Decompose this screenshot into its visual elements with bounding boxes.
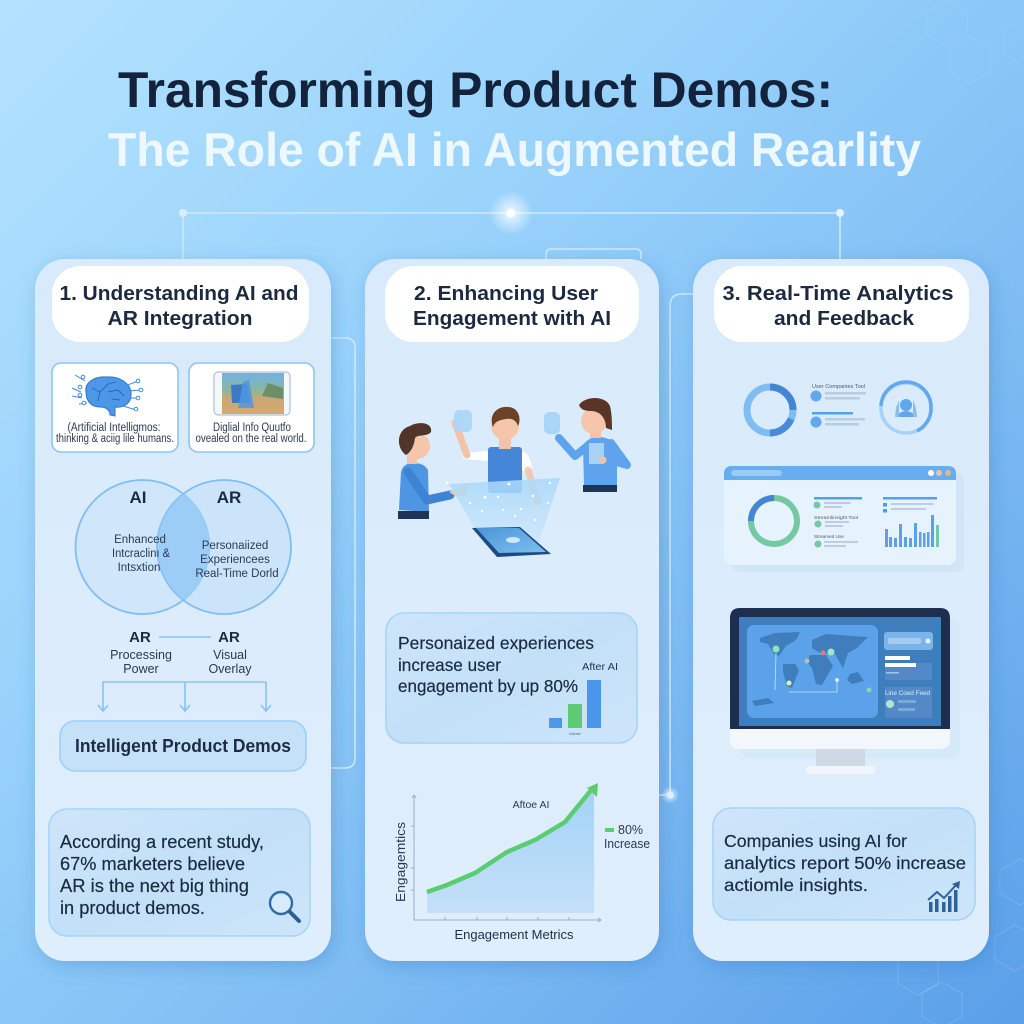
panel 3: real-time analytics and feedback [693,259,989,961]
venn labels: Real-Time Dorld [195,568,279,580]
panel 2 heading: 2. Enhancing User [414,282,598,305]
stat callout: personalized experiences: increase user [398,655,501,675]
chart axes [411,795,601,922]
panel 1 background [35,259,331,961]
stat callout: 67% marketers: According a recent study, [60,831,264,852]
title [108,62,921,176]
person left [398,423,468,519]
stat callout: 67% marketers: in product demos. [60,897,205,918]
legend lines [810,384,866,428]
panel 1 heading [52,266,309,342]
stat callout: 50% actionable insights: Companies using AI for [724,831,907,851]
stat callout: 67% marketers: 67% marketers believe [60,853,245,874]
panel 1 heading: AR Integration [108,307,252,330]
user ring widget [881,382,931,433]
panel 1 heading: 1. Understanding AI and [60,282,298,305]
panel 3 heading: 3. Real-Time Analytics [722,282,954,305]
dashboard list: Streamed Use [814,534,845,539]
venn labels [112,488,279,580]
panel 2 background [365,259,659,961]
icon: brain [72,375,143,416]
monitor side panels [884,632,933,718]
venn labels: AR [217,488,241,507]
hologram projection [446,478,560,545]
stat callout: personalized experiences: Personaized experiences [398,633,594,653]
monitor frame [730,608,950,729]
panel 3 heading [714,266,969,342]
panel 3 heading: and Feedback [774,307,915,330]
AR capabilities row [110,629,252,676]
legend lines: User Companies Tool [812,384,865,390]
stat callout: 50% actionable insights: actiomle insights. [724,875,868,895]
trend line [427,789,592,892]
dashboard list [814,497,862,548]
AR capabilities row: Visual [213,648,247,662]
card text: Diglial Info Quutfo [213,422,291,434]
world map [747,625,878,718]
chart labels: 80% [618,823,643,837]
venn labels: Enhanced [114,534,166,546]
stat callout: 50% actionable insights [713,808,975,920]
card: artificial intelligence: thinking & aciig lile humans. [56,433,174,445]
monitor shadow [741,618,960,758]
card: artificial intelligence [52,363,178,452]
venn labels: AI [130,488,146,507]
venn overlap [157,494,210,600]
analytics widgets row [747,382,931,433]
chart area fill [427,788,594,913]
panel 1: understanding AI and AR integration [35,259,331,961]
panel 2: enhancing user engagement with AI [365,259,659,961]
chart labels [393,799,650,942]
stat callout: 67% marketers: AR is the next big thing [60,875,249,896]
illustration: people with AR hologram [398,398,627,557]
panel 2 heading [385,266,639,342]
stat callout: 67% marketers [49,809,310,936]
venn labels: Intsxtion [118,562,160,574]
trend arrowhead [587,783,598,797]
dashboard window [724,466,964,572]
chart labels: Aftoe AI [513,799,549,811]
venn circle AI [76,480,210,614]
AR capabilities row: Processing [110,648,172,662]
venn circle AR [157,480,291,614]
chart labels: Increase [604,837,650,851]
tablet [472,527,551,557]
dashboard donut [751,498,797,544]
stat callout: personalized experiences: engagement by up 80% [398,676,578,696]
card: augmented reality: ovealed on the real world. [196,433,306,445]
intelligent product demos box: Intelligent Product Demos [75,736,291,756]
panel 2 heading: Engagement with AI [413,307,611,330]
mini bar chart [549,661,618,736]
intelligent product demos box [60,721,306,771]
connector network [179,191,844,804]
card text: (Artificial Intelligmos: [68,422,160,434]
icon: phone with AR scene [214,372,290,415]
dashboard bars [883,497,939,547]
hexagon pattern [898,0,1024,1024]
icon: growth chart [928,881,960,912]
donut widget [747,387,793,433]
AR capabilities row: AR [129,629,151,646]
arrows to intelligent product demos [98,682,271,711]
venn labels: Intcraclinı & [112,548,170,560]
chart labels: Engagemtics [393,821,408,902]
monitor side panels: Line Coed Feed [885,690,930,697]
mini bar chart: Initiate [569,731,582,736]
AR capabilities row: Overlay [208,662,252,676]
dashboard list: Streamlinsight Tool [814,515,858,520]
monitor stand [806,749,875,774]
monitor with world map [730,608,960,774]
venn labels: Personaiized [202,540,268,552]
engagement line chart [393,783,650,942]
venn diagram [76,480,291,614]
person center [454,407,538,502]
title line 1: Transforming Product Demos: [118,62,833,118]
venn labels: Experiencees [200,554,270,566]
card: augmented reality [189,363,314,452]
AR capabilities row: AR [218,629,240,646]
AR capabilities row: Power [123,662,159,676]
title line 2: The Role of AI in Augmented Rearlity [108,123,921,176]
stat callout: personalized experiences [386,613,637,743]
mini bar chart: After AI [582,661,618,673]
icon: magnifying glass [270,892,299,921]
panel 3 background [693,259,989,961]
person right [544,398,627,492]
stat callout: 50% actionable insights: analytics report 50% increase [724,853,966,873]
chart labels: Engagement Metrics [454,927,574,942]
